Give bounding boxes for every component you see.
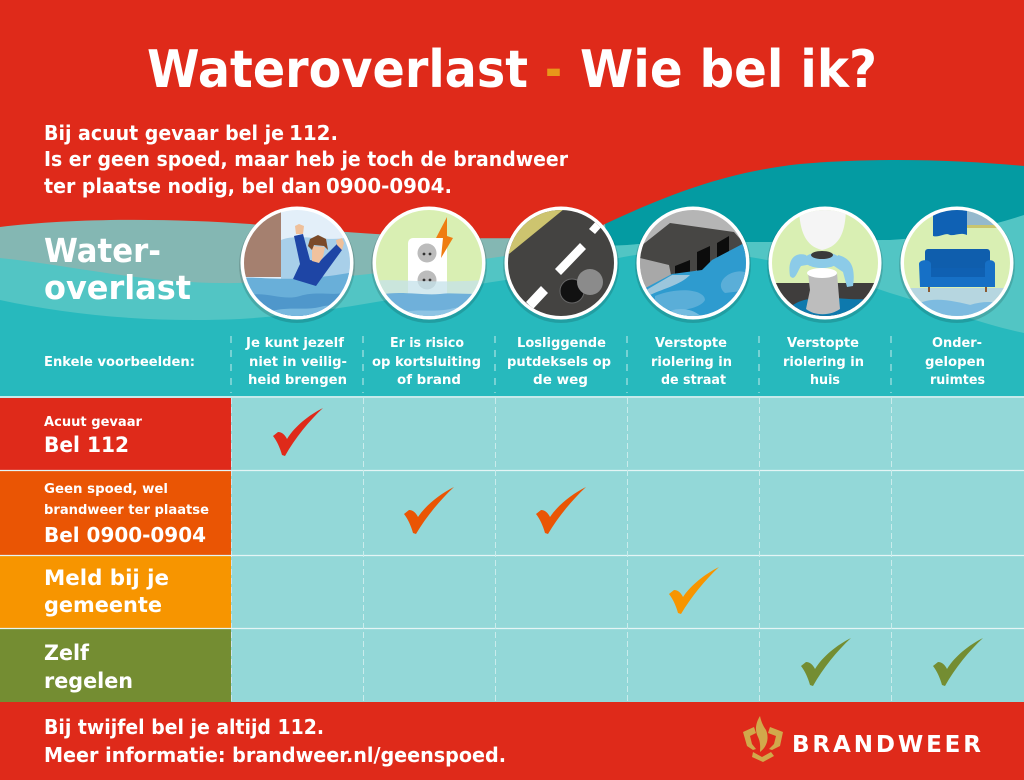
column labels xyxy=(245,335,985,388)
intro text: ter plaatse nodig, bel dan xyxy=(44,174,321,198)
check: green 1 xyxy=(801,638,851,686)
check: green 2 xyxy=(933,638,983,686)
row: Acuut gevaar xyxy=(0,398,231,470)
row: Geen spoed: Geen spoed, wel xyxy=(44,481,168,497)
footer text xyxy=(44,715,506,767)
column labels: Er is risico xyxy=(390,335,464,351)
row: Acuut gevaar: Bel 112 xyxy=(44,433,129,457)
column labels: Verstopte xyxy=(787,335,859,351)
column labels: riolering in xyxy=(783,354,864,370)
person xyxy=(293,224,344,286)
check: amber xyxy=(669,567,719,614)
icon: flooded room with sofa xyxy=(899,205,1015,323)
column labels: Je kunt jezelf xyxy=(245,335,344,351)
column labels: de straat xyxy=(661,372,727,388)
icon: loose manhole xyxy=(503,205,619,323)
row: Zelf regelen: regelen xyxy=(44,669,133,693)
row: Meld bij je gemeente xyxy=(0,556,231,628)
check: red xyxy=(273,408,323,456)
lightning xyxy=(436,217,453,258)
column labels: gelopen xyxy=(925,354,985,370)
footer xyxy=(0,702,1024,780)
heading: Water-overlast: Water- xyxy=(44,231,161,270)
column dividers xyxy=(231,336,891,393)
intro text: 112. xyxy=(289,121,338,145)
column labels: riolering in xyxy=(651,354,732,370)
background: water waves xyxy=(0,160,1024,400)
check: orange 2 xyxy=(536,487,586,534)
column labels: Verstopte xyxy=(655,335,727,351)
title xyxy=(147,40,877,100)
heading: Water-overlast xyxy=(44,231,191,307)
logo: Brandweer xyxy=(743,716,981,762)
title: Wie bel ik? xyxy=(580,40,877,100)
row: Geen spoed: Bel 0900-0904 xyxy=(44,523,206,547)
column labels: de weg xyxy=(533,372,588,388)
row: Acuut gevaar: Acuut gevaar xyxy=(44,414,142,430)
table grid lines xyxy=(0,397,1024,628)
label: Enkele voorbeelden: Enkele voorbeelden: xyxy=(44,354,195,370)
intro text xyxy=(44,121,568,198)
icon: blocked street drain xyxy=(635,205,751,323)
column labels: ruimtes xyxy=(930,372,985,388)
check: orange 1 xyxy=(404,487,454,534)
column labels: op kortsluiting xyxy=(372,354,481,370)
logo: Brandweer: BRANDWEER xyxy=(792,732,981,758)
row: Meld bij je gemeente: Meld bij je xyxy=(44,566,169,590)
column labels: putdeksels op xyxy=(507,354,611,370)
table body xyxy=(0,396,1024,702)
column labels: Onder- xyxy=(932,335,982,351)
icon: blocked toilet xyxy=(767,205,883,323)
column labels: heid brengen xyxy=(248,372,347,388)
column labels: huis xyxy=(810,372,840,388)
footer text: Bij twijfel bel je altijd 112. xyxy=(44,715,324,739)
intro text: Bij acuut gevaar bel je xyxy=(44,121,284,145)
icon: socket with lightning xyxy=(371,205,487,323)
column labels: of brand xyxy=(397,372,461,388)
heading: Water-overlast: overlast xyxy=(44,268,191,307)
footer text: Meer informatie: brandweer.nl/geenspoed. xyxy=(44,743,506,767)
row: Geen spoed: brandweer ter plaatse xyxy=(44,502,209,518)
intro text: 0900-0904. xyxy=(326,174,452,198)
row: Meld bij je gemeente: gemeente xyxy=(44,593,162,617)
column labels: niet in veilig- xyxy=(249,354,347,370)
icon: person in water xyxy=(239,205,355,323)
row: Zelf regelen xyxy=(0,629,231,702)
title: - xyxy=(545,40,562,100)
intro text: Is er geen spoed, maar heb je toch de brandweer xyxy=(44,147,568,171)
row: Geen spoed xyxy=(0,471,231,555)
background: red header xyxy=(0,0,1024,400)
column labels: Losliggende xyxy=(517,335,606,351)
row: Zelf regelen: Zelf xyxy=(44,641,90,665)
title: Wateroverlast xyxy=(147,40,528,100)
